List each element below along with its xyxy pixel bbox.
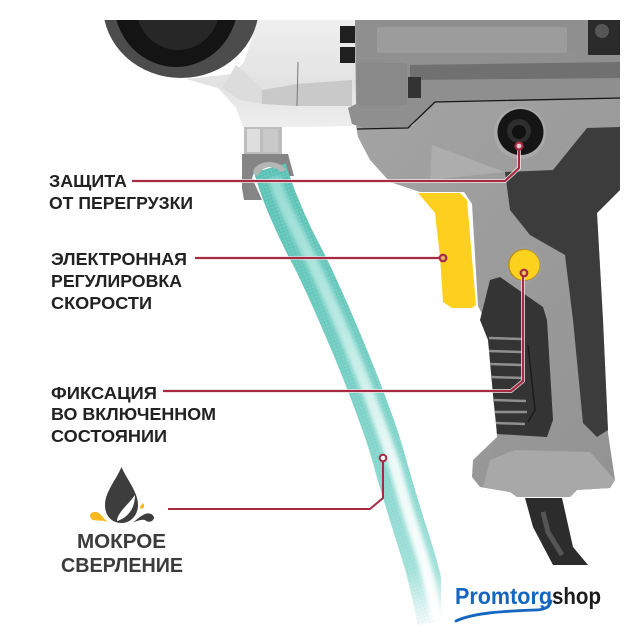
hose clamp: [242, 154, 294, 200]
label: wet drilling: СВЕРЛЕНИЕ: [61, 554, 183, 577]
hose: [270, 168, 437, 622]
silver gearbox: [186, 20, 357, 127]
logo mask: [441, 566, 640, 640]
callout: wet drilling: [168, 455, 386, 509]
lower dark rubber panel: [480, 277, 553, 437]
chuck ring: [104, 20, 258, 78]
label: electronic speed control: СКОРОСТИ: [51, 293, 152, 313]
logo: Promtorgshop: [455, 583, 601, 621]
label: on-lock: ВО ВКЛЮЧЕННОМ: [51, 404, 216, 424]
label: wet drilling: МОКРОЕ: [77, 530, 166, 553]
callout: on-lock: [163, 270, 527, 391]
callout: electronic speed control: [195, 255, 446, 261]
label: wet drilling: [61, 530, 183, 577]
rubber ribs: [489, 338, 527, 424]
upper housing: [348, 20, 620, 128]
overload protection knob: [494, 107, 546, 159]
grip gray shell: [356, 98, 620, 497]
logo: Promtorgshop: Promtorg: [455, 583, 552, 609]
label: electronic speed control: РЕГУЛИРОВКА: [51, 271, 182, 291]
callout: overload protection: [132, 142, 522, 181]
callout lines: [132, 142, 527, 509]
label: overload protection: ОТ ПЕРЕГРУЗКИ: [49, 193, 193, 213]
trigger: [418, 193, 476, 308]
clamp front: [253, 162, 286, 176]
lock button: [508, 249, 540, 281]
label: on-lock: ФИКСАЦИЯ: [51, 383, 157, 403]
drill photo: [103, 0, 620, 565]
icon: oil drop with splashes: [90, 467, 154, 523]
label: on-lock: [51, 383, 216, 446]
rear dark rubber grip: [505, 127, 620, 437]
vent slots: [340, 26, 355, 63]
base highlight: [483, 450, 615, 497]
logo: Promtorgshop: shop: [552, 583, 601, 609]
power cable: [525, 498, 588, 565]
label: overload protection: ЗАЩИТА: [49, 171, 127, 191]
nut: [244, 127, 282, 154]
label: on-lock: СОСТОЯНИИ: [51, 426, 167, 446]
label: electronic speed control: [51, 249, 187, 313]
label: electronic speed control: ЭЛЕКТРОННАЯ: [51, 249, 187, 269]
label: overload protection: [49, 171, 193, 213]
